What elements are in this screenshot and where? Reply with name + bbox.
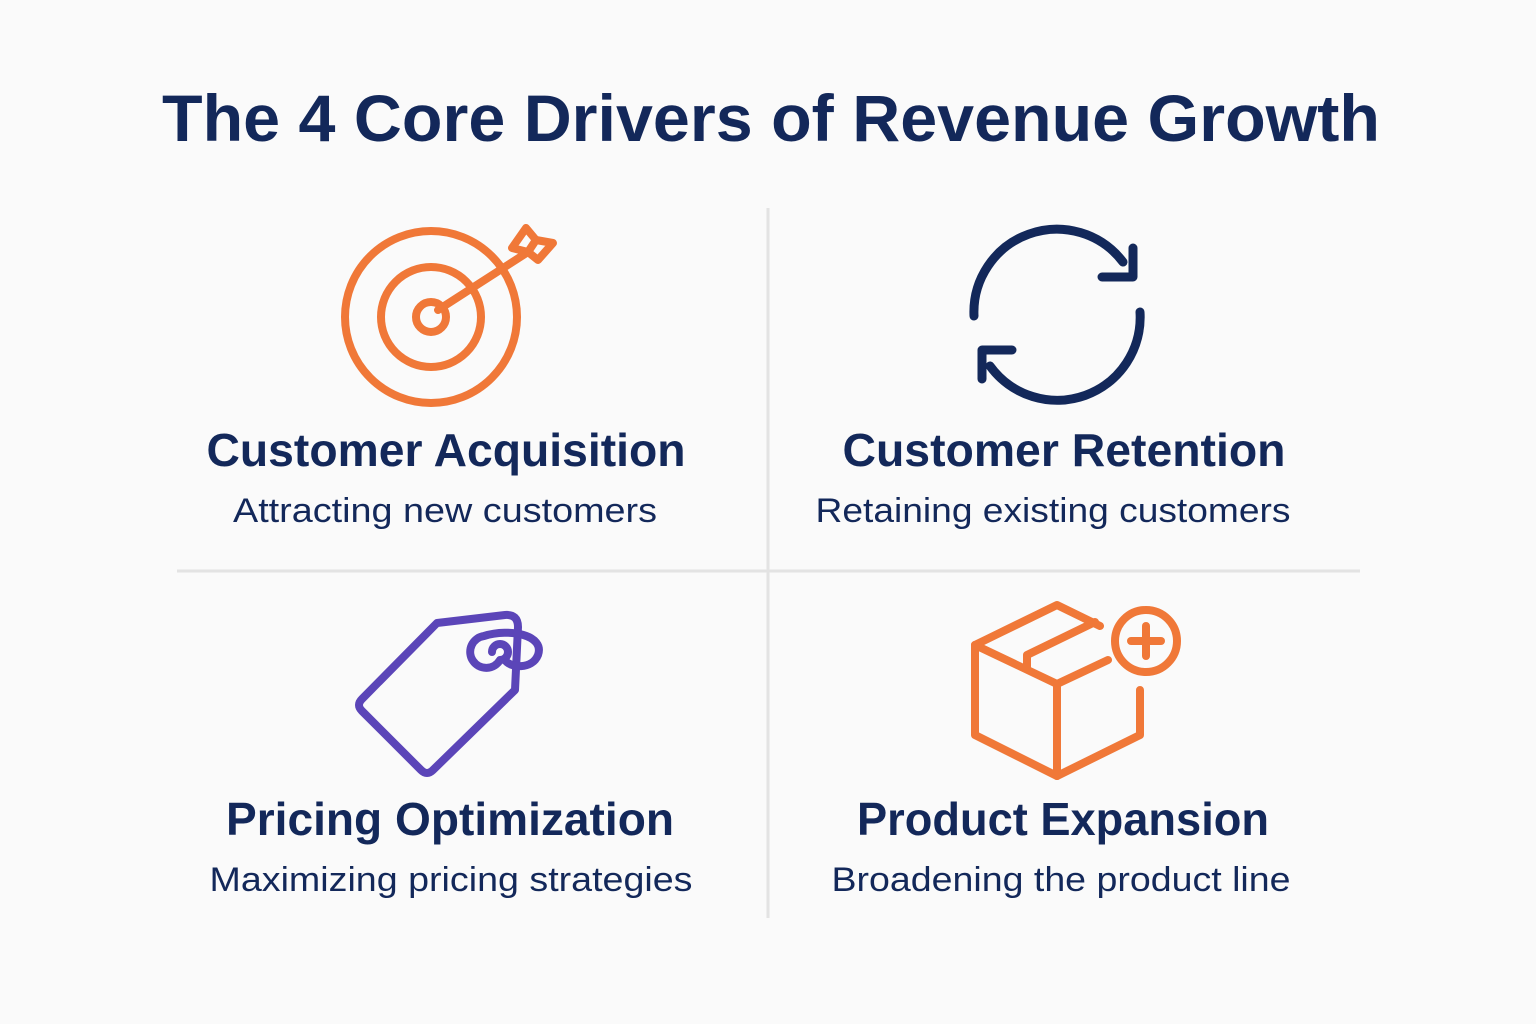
heading: pricing optimization: Pricing Optimization (226, 793, 674, 845)
subtitle: Attracting new customers (233, 492, 657, 530)
icon: target (345, 228, 553, 403)
icon: box with plus (975, 605, 1177, 776)
heading: product expansion: Product Expansion (857, 793, 1269, 845)
panel: customer acquisition (206, 228, 686, 530)
subtitle: Retaining existing customers (816, 492, 1290, 530)
subtitle: Maximizing pricing strategies (210, 861, 692, 899)
subtitle: Broadening the product line (832, 861, 1290, 899)
icon: price tag (359, 615, 539, 773)
panel: customer retention (816, 229, 1290, 530)
icon: cycle arrows (974, 229, 1140, 400)
title: The 4 Core Drivers of Revenue Growth (162, 81, 1380, 155)
heading: customer retention: Customer Retention (842, 424, 1286, 476)
panel: product expansion (832, 605, 1290, 899)
heading: customer acquisition: Customer Acquisition (206, 424, 686, 476)
panel: pricing optimization (210, 615, 692, 899)
